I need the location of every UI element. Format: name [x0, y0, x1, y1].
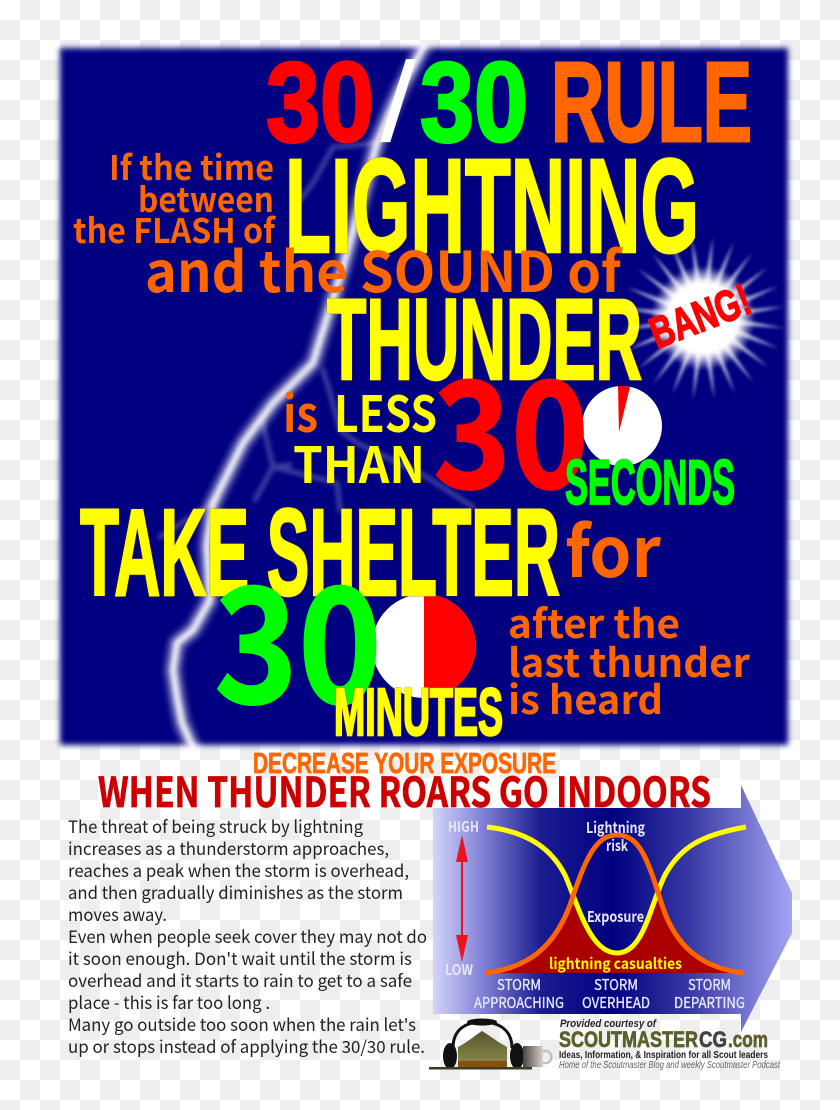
area: lightning casualties	[485, 893, 744, 973]
number: big green 30: 30	[214, 518, 382, 750]
text block: explanation: Many go outside too soon when the rain let's	[68, 1011, 416, 1036]
arrow background	[433, 785, 792, 1032]
text block: explanation: overhead and it starts to rain to get to a safe	[68, 967, 412, 992]
white strip behind heading	[98, 778, 741, 808]
text: is less than: LESS	[334, 375, 437, 447]
starburst	[621, 236, 785, 400]
credit: provided courtesy of scoutmastercg.com: CG	[699, 1027, 727, 1052]
text: for: for	[565, 497, 661, 598]
arrow: high-low scale	[456, 835, 468, 962]
text: if the time between the flash of: the FLASH of	[73, 204, 276, 253]
text block: explanation: The threat of being struck by lightning	[68, 813, 363, 838]
chart labels: HIGH	[448, 816, 479, 837]
text block: explanation: place - this is far too long .	[68, 989, 270, 1014]
text: MINUTES: MINUTES	[334, 675, 503, 750]
heading: when thunder roars go indoors: WHEN THUNDER ROARS GO INDOORS	[98, 759, 711, 819]
chart labels: Lightning	[586, 817, 645, 838]
logo: scout hat with headphones and mug	[429, 1018, 551, 1070]
text: is less than: THAN	[293, 426, 425, 498]
panel: blue lightning poster	[60, 39, 788, 750]
credit: provided courtesy of scoutmastercg.com: SCOUTMASTER	[559, 1027, 698, 1052]
chart labels	[445, 816, 682, 980]
credit: provided courtesy of scoutmastercg.com: Provided courtesy of	[560, 1018, 657, 1030]
curve: exposure	[487, 827, 746, 953]
text: if the time between the flash of: If the time	[109, 141, 274, 190]
icon: half-hour clock	[372, 594, 476, 698]
chart labels: Exposure	[587, 906, 644, 927]
title: 30/30 RULE: /	[380, 39, 417, 165]
text block: explanation: up or stops instead of applying the 30/30 rule.	[68, 1033, 425, 1058]
text: after the last thunder is heard: is heard	[508, 670, 663, 726]
text block: explanation: Even when people seek cover they may not do	[68, 923, 427, 948]
text block: explanation: reaches a peak when the storm is overhead,	[68, 857, 409, 882]
chart: lightning risk vs exposure arrow: STORM	[497, 974, 541, 995]
credit: provided courtesy of scoutmastercg.com: Home of the Scoutmaster Blog and weekly Scoutmaster Podcast	[559, 1060, 781, 1071]
text: BANG!: BANG!	[643, 275, 758, 358]
credit: provided courtesy of scoutmastercg.com: Ideas, Information, & Inspiration for all Scout leaders	[559, 1049, 768, 1061]
chart: lightning risk vs exposure arrow: DEPARTING	[674, 992, 745, 1013]
chart: lightning risk vs exposure arrow: STORM	[594, 974, 638, 995]
text: after the last thunder is heard: after the	[508, 594, 680, 650]
chart: lightning risk vs exposure arrow	[433, 785, 792, 1032]
text block: explanation: increases as a thunderstorm approaches,	[68, 835, 389, 860]
text: if the time between the flash of: between	[138, 173, 274, 222]
text block: explanation	[68, 813, 427, 1058]
title: 30/30 RULE: 30	[266, 39, 374, 165]
text: after the last thunder is heard: last thunder	[508, 633, 751, 689]
chart: lightning risk vs exposure arrow: STORM	[688, 974, 731, 995]
curve: lightning risk	[485, 835, 744, 973]
text: is less than: is	[283, 375, 318, 447]
text block: explanation: and then gradually diminishes as the storm	[68, 879, 403, 904]
text: after the last thunder is heard	[508, 594, 751, 726]
number: big red 30: 30	[433, 316, 589, 531]
text block: explanation: it soon enough. Don't wait until the storm is	[68, 945, 412, 970]
text: and the sound of: and the SOUND of	[145, 228, 623, 309]
chart: lightning risk vs exposure arrow: OVERHEAD	[582, 992, 650, 1013]
lightning bolt background	[160, 46, 473, 748]
credit: provided courtesy of scoutmastercg.com	[559, 1018, 781, 1071]
credit: provided courtesy of scoutmastercg.com: .com	[728, 1027, 768, 1052]
title: 30/30 RULE	[266, 39, 752, 165]
title: 30/30 RULE: 30	[420, 39, 528, 165]
chart: lightning risk vs exposure arrow: APPROACHING	[474, 992, 564, 1013]
text: if the time between the flash of	[73, 141, 276, 253]
text block: explanation: moves away.	[68, 901, 167, 926]
text: is less than	[283, 375, 437, 498]
chart labels: LOW	[445, 959, 473, 980]
heading: decrease your exposure: DECREASE YOUR EXPOSURE	[253, 748, 556, 780]
chart labels: lightning casualties	[549, 953, 682, 974]
chart labels: risk	[606, 835, 628, 856]
icon: clock 30 seconds	[582, 386, 662, 466]
